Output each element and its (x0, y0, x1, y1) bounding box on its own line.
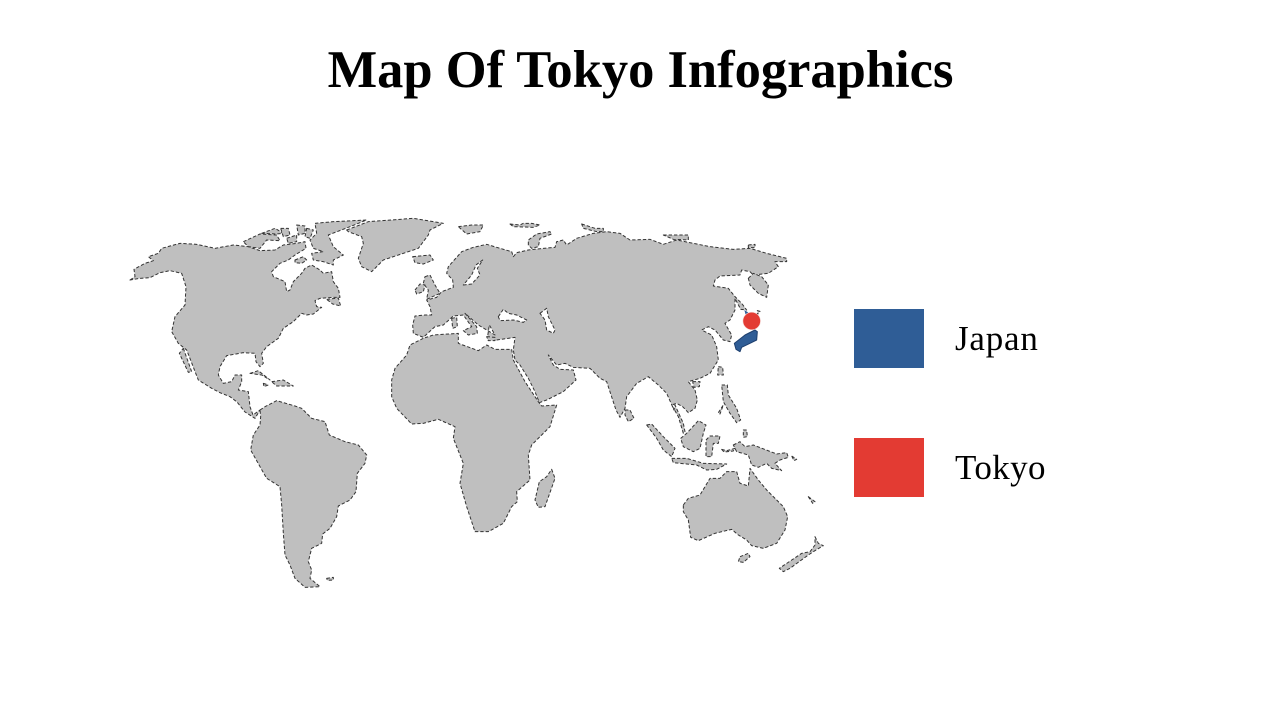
Southeast Asia and Oceania (625, 382, 823, 572)
Japan highlight (734, 310, 757, 352)
legend: Tokyo label: Tokyo (955, 448, 1046, 487)
legend: Japan swatch (854, 309, 924, 368)
Eurasia (413, 223, 787, 433)
Tokyo marker (743, 312, 760, 330)
legend: Japan label: Japan (955, 319, 1039, 358)
North America and Greenland (130, 218, 443, 418)
legend: Tokyo swatch (854, 438, 924, 497)
South America and Africa (251, 333, 557, 587)
title: Map Of Tokyo Infographics (328, 41, 953, 99)
